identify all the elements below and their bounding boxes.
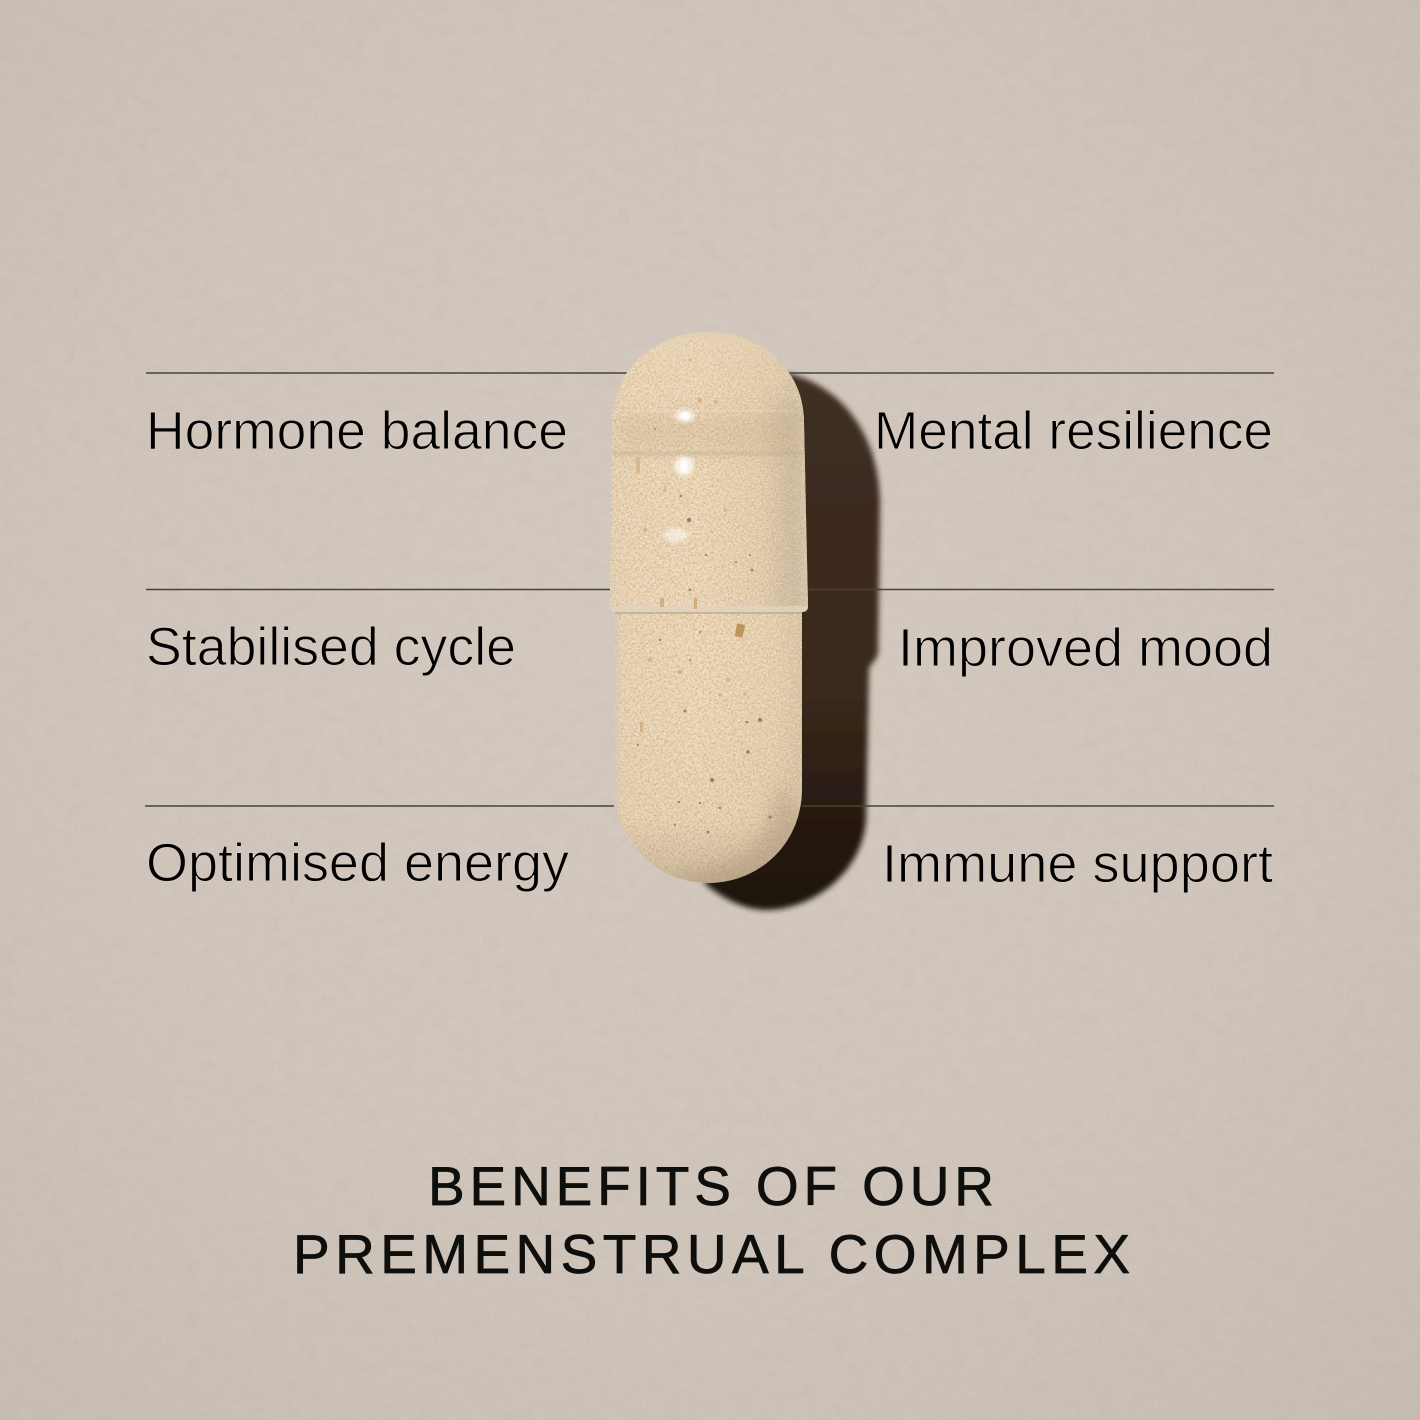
specks: [636, 358, 772, 833]
cap seam: [615, 612, 802, 614]
title line 2: PREMENSTRUAL COMPLEX: [293, 1223, 1130, 1285]
capsule shadow: [700, 373, 880, 910]
capsule body: [615, 612, 802, 883]
label: Hormone balance: Hormone balance: [146, 401, 568, 461]
title line 1: BENEFITS OF OUR: [428, 1155, 994, 1217]
label: Optimised energy: Optimised energy: [146, 833, 569, 893]
right labels: [874, 401, 1273, 894]
left labels: [146, 401, 569, 893]
title: [293, 1155, 1130, 1285]
label: Improved mood: Improved mood: [898, 618, 1273, 678]
label: Immune support: Immune support: [882, 834, 1273, 894]
highlights: [664, 410, 695, 542]
label: Stabilised cycle: Stabilised cycle: [146, 617, 516, 677]
label: Mental resilience: Mental resilience: [874, 401, 1273, 461]
divider lines: [145, 373, 1274, 806]
capsule cap: [608, 330, 810, 615]
capsule: [608, 330, 815, 895]
